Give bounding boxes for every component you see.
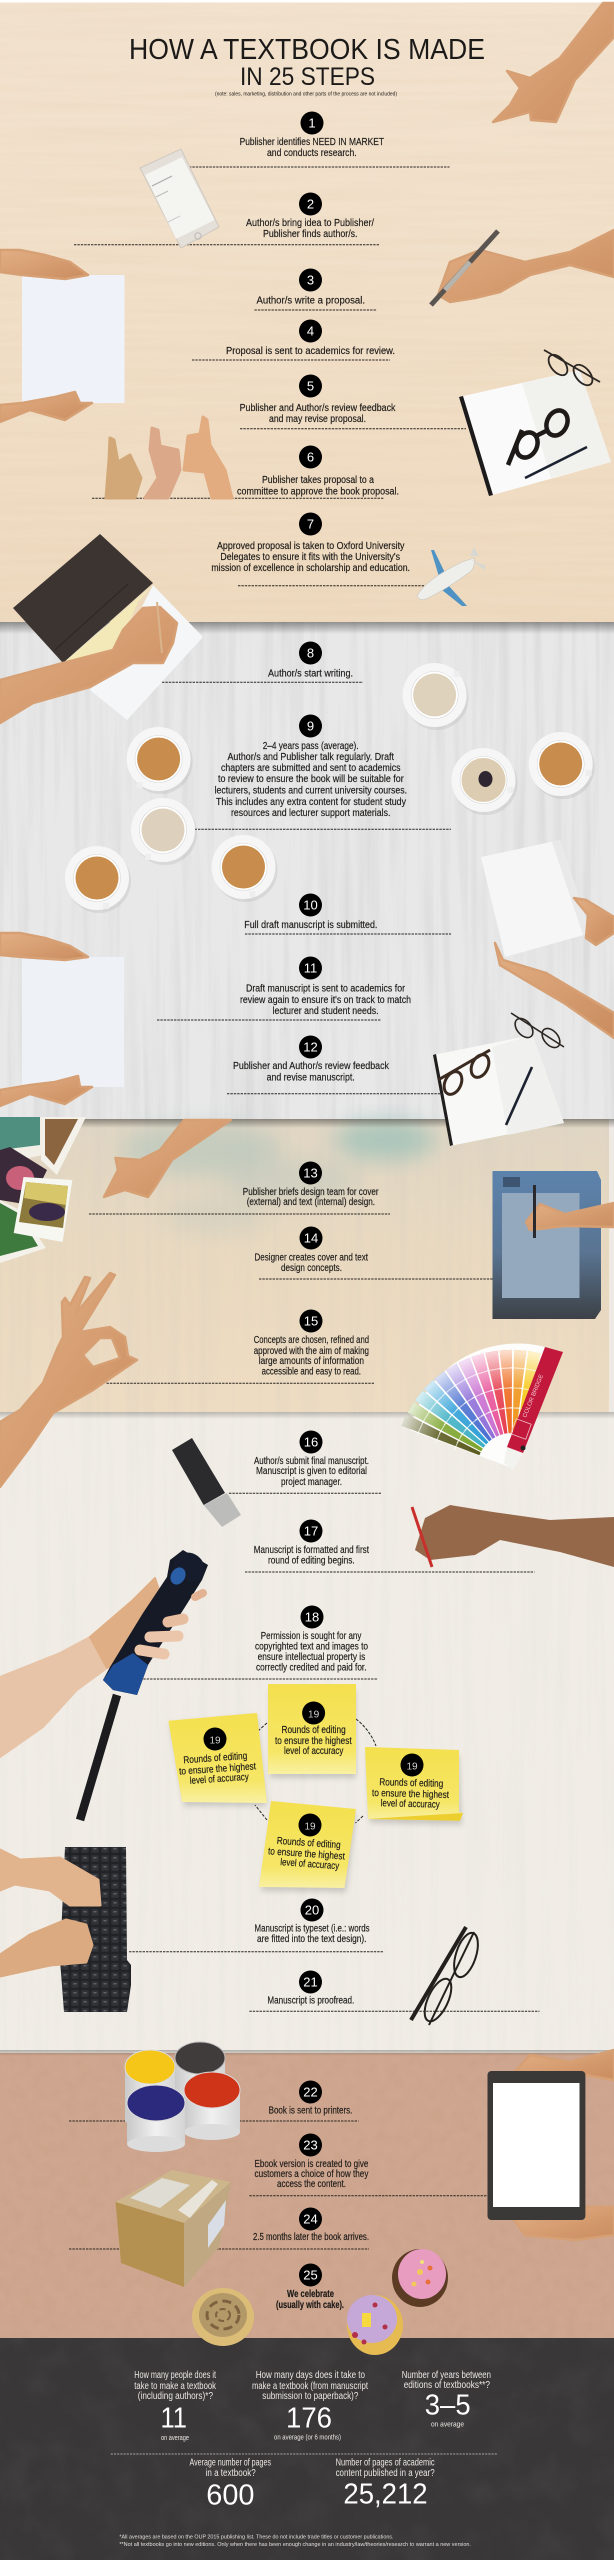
icon: hand holding red pencil (412, 1505, 614, 1567)
stat: average pages (190, 2458, 271, 2512)
sticky note: bottom: Rounds of editing (276, 1836, 341, 1851)
sticky note: right: level of accuracy (381, 1798, 440, 1811)
sticky note: left: to ensure the highest (179, 1761, 257, 1778)
step 20: 20 (305, 1902, 319, 1918)
step 16: project manager. (281, 1477, 342, 1488)
step 20 (129, 1898, 384, 1952)
step 6: Publisher takes proposal to a (262, 475, 374, 486)
step 11 (157, 956, 411, 1020)
step 7: Delegates to ensure it fits with the University's (220, 552, 400, 563)
step 13: 13 (303, 1166, 318, 1180)
icon: USB stick (172, 1438, 241, 1527)
stat: days to make a textbook: make a textbook (from manuscript (252, 2381, 368, 2392)
step 2: Publisher finds author/s. (263, 229, 358, 240)
step 11: Draft manuscript is sent to academics for (246, 984, 406, 994)
stat: years between editions (402, 2370, 491, 2428)
step 12 (227, 1036, 440, 1094)
step 13: (external) and text (internal) design. (247, 1197, 375, 1208)
step 5: 5 (307, 378, 314, 394)
icon: hands holding e-reader tablet (488, 2050, 614, 2240)
sticky note: top (268, 1684, 356, 1778)
icon: pink cupcake (392, 2249, 448, 2307)
sticky note: left (168, 1713, 267, 1806)
sticky note: left: 19 (209, 1736, 221, 1746)
icon: graphics tablet and hand (492, 1171, 614, 1319)
step 3: 3 (307, 272, 314, 288)
step 4: 4 (307, 324, 314, 338)
footnotes (119, 2534, 471, 2548)
panel: statistics chalkboard background (0, 2338, 614, 2560)
step 6 (92, 446, 399, 498)
step 17: 17 (304, 1524, 318, 1538)
panel: proposal stage wood background (0, 0, 614, 622)
sticky note: top: 19 (308, 1710, 320, 1720)
stat: people per textbook: (including authors)*? (138, 2391, 213, 2402)
step 13: Publisher briefs design team for cover (243, 1187, 379, 1198)
step 10: Full draft manuscript is submitted. (244, 920, 377, 931)
step 18: ensure intellectual property is (258, 1652, 365, 1663)
icon: hands holding blank paper (0, 250, 124, 422)
step 9: 9 (307, 718, 314, 734)
step 25: 25 (303, 2268, 318, 2282)
icon: spare glasses (544, 350, 600, 389)
step 9: This includes any extra content for student study (216, 797, 406, 808)
icon: lavender cupcake (347, 2295, 403, 2355)
step 15: accessible and easy to read. (262, 1366, 361, 1378)
sticky note: right (365, 1747, 463, 1825)
stat: academic pages per year: content published in a year? (336, 2468, 435, 2479)
step 15: 15 (304, 1314, 318, 1328)
stat: years between editions: 3–5 (425, 2390, 471, 2422)
step 14: design concepts. (281, 1263, 342, 1274)
step 22 (69, 2080, 359, 2121)
stat: people per textbook: take to make a textbook (134, 2381, 217, 2392)
step 23: 23 (303, 2138, 318, 2152)
stat: people per textbook: 11 (160, 2402, 187, 2434)
step 9: chapters are submitted and sent to academics (221, 763, 400, 774)
title: IN 25 STEPS (240, 63, 375, 91)
step 24 (69, 2208, 369, 2249)
step 12: 12 (303, 1040, 318, 1054)
step 9: 2–4 years pass (average). (263, 741, 359, 752)
stat: average pages: 600 (206, 2480, 254, 2512)
step 2: 2 (307, 196, 314, 212)
sticky note: left: Rounds of editing (183, 1751, 248, 1766)
icon: coffee cup foam left (131, 798, 197, 865)
step 4 (192, 320, 395, 360)
sticky note: bottom: to ensure the highest (268, 1846, 345, 1863)
stat: years between editions: Number of years between (402, 2370, 491, 2381)
step 12: Publisher and Author/s review feedback (233, 1061, 390, 1072)
icon: pointing hand top right (493, 3, 614, 122)
step 7: mission of excellence in scholarship and education. (211, 563, 410, 574)
step 15: approved with the aim of making (254, 1346, 369, 1357)
step 18: correctly credited and paid for. (256, 1662, 366, 1674)
step 22: Book is sent to printers. (269, 2106, 352, 2116)
sticky note: right: to ensure the highest (372, 1788, 449, 1801)
icon: scattered photographs (0, 1117, 86, 1263)
step 11: review again to ensure it's on track to match (240, 995, 411, 1006)
step 9 (195, 714, 451, 829)
icon: coffee cup nearly empty (452, 748, 518, 815)
step 9: lecturers, students and current university courses. (215, 786, 407, 796)
icon: OK hand gesture (0, 1273, 137, 1487)
step 14 (254, 1226, 492, 1279)
icon: pointing hand from top (104, 1120, 231, 1197)
step 9: to review to ensure the book will be suitable for (218, 774, 404, 785)
step 20: are fitted into the text design). (257, 1934, 366, 1945)
step 9: resources and lecturer support materials. (231, 808, 390, 819)
footnotes: *All averages are based on the OUP 2015 publishing list. These do not include trade titles or customer publications. (119, 2534, 394, 2540)
sticky note: right: Rounds of editing (379, 1777, 443, 1790)
sticky note: right: 19 (406, 1762, 418, 1772)
step 8 (162, 642, 363, 682)
step 8: 8 (307, 646, 314, 660)
stat: average pages: Average number of pages (190, 2458, 271, 2468)
icon: coffee cup left upper (127, 727, 193, 794)
step 10: 10 (303, 898, 318, 912)
step 15: large amounts of information (259, 1356, 364, 1367)
icon: cardboard parcel (116, 2170, 231, 2287)
title: HOW A TEXTBOOK IS MADE (129, 34, 485, 66)
step 18: copyrighted text and images to (255, 1642, 368, 1652)
icon: coffee cup latte right top (403, 663, 469, 730)
step 18: Permission is sought for any (261, 1631, 361, 1642)
step 22: 22 (303, 2084, 318, 2100)
icon: keyboard and typing hands (0, 1847, 131, 2012)
stat: academic pages per year: 25,212 (343, 2478, 428, 2510)
step 7 (211, 512, 425, 586)
step 5: and may revise proposal. (269, 414, 366, 425)
sticky note: top: to ensure the highest (275, 1736, 352, 1747)
step 16: Author/s submit final manuscript. (254, 1456, 369, 1467)
stat: days to make a textbook: submission to paperback)? (262, 2391, 359, 2402)
step 15: Concepts are chosen, refined and (254, 1335, 369, 1346)
stat: years between editions: editions of textbooks**? (404, 2380, 490, 2391)
step 23 (249, 2134, 488, 2196)
sticky note cycle step 19 (168, 1684, 463, 1892)
icon: hand holding telephone (0, 1547, 210, 1820)
step 5 (240, 374, 466, 429)
stat: academic pages per year: Number of pages of academic (336, 2458, 435, 2468)
icon: hand writing with pen (431, 230, 614, 305)
icon: airplane (417, 547, 486, 606)
step 9: Author/s and Publisher talk regularly. Draft (228, 752, 394, 763)
footnotes: **Not all textbooks go into new editions. Only when there has been enough change in an industry/law/theories/research to warrant a new version. (119, 2542, 471, 2548)
stat: years between editions: on average (431, 2422, 464, 2428)
step 13 (89, 1162, 390, 1214)
step 23: Ebook version is created to give (254, 2159, 369, 2170)
step 15 (106, 1310, 374, 1383)
icon: coffee cup centre lower (212, 835, 278, 902)
icon: thumbs up hands (106, 417, 232, 498)
title: (note: sales, marketing, distribution and other parts of the process are not included) (215, 92, 397, 98)
icon: hands holding white book (481, 840, 614, 1038)
step 3 (254, 268, 377, 310)
step 20: Manuscript is typeset (i.e.: words (254, 1924, 370, 1934)
step 1: Publisher identifies NEED IN MARKET (240, 137, 384, 148)
sticky note: bottom: level of accuracy (280, 1857, 340, 1872)
stat: days to make a textbook: on average (or 6 months) (274, 2434, 341, 2442)
sticky note: bottom: 19 (304, 1822, 316, 1832)
step 12: and revise manuscript. (267, 1072, 355, 1084)
step 2 (74, 192, 379, 245)
step 14: Designer creates cover and text (254, 1252, 368, 1264)
stat: days to make a textbook (252, 2370, 368, 2442)
icon: open notebook with glasses (433, 1035, 564, 1146)
stat: people per textbook (134, 2370, 217, 2442)
icon: smartphone (140, 149, 219, 248)
step 6: committee to approve the book proposal. (237, 486, 399, 498)
step 25: We celebrate (287, 2289, 334, 2300)
step 17: round of editing begins. (268, 1556, 355, 1566)
sticky note: bottom (259, 1801, 356, 1892)
icon: ink cans (125, 2042, 240, 2152)
icon: coffee cup far right (529, 732, 595, 799)
step 10 (244, 894, 451, 934)
step 21: 21 (303, 1974, 318, 1990)
step 18: 18 (305, 1610, 319, 1624)
step 8: Author/s start writing. (268, 668, 353, 680)
stat: average pages: in a textbook? (206, 2468, 256, 2479)
stat: days to make a textbook: 176 (286, 2402, 332, 2434)
step 5: Publisher and Author/s review feedback (240, 403, 396, 414)
step 7: 7 (307, 516, 314, 532)
icon: spare glasses on wood (511, 1013, 564, 1051)
sticky note: left: level of accuracy (189, 1772, 249, 1787)
step 1: 1 (308, 116, 316, 130)
icon: hands holding blank manuscript (0, 933, 124, 1106)
step 21 (249, 1970, 540, 2011)
step 23: access the content. (277, 2179, 346, 2190)
step 2: Author/s bring idea to Publisher/ (246, 218, 374, 229)
icon: caramel cupcake (192, 2288, 254, 2346)
stat: people per textbook: on average (161, 2435, 189, 2442)
icon: dark notebook with hand writing (0, 534, 203, 723)
step 3: Author/s write a proposal. (256, 296, 365, 306)
step 24: 24 (303, 2212, 318, 2226)
step 7: Approved proposal is taken to Oxford University (217, 541, 404, 552)
step 23: customers a choice of how they (254, 2169, 368, 2180)
icon: reading glasses (411, 1927, 483, 2025)
step 14: 14 (304, 1230, 318, 1246)
step 17: Manuscript is formatted and first (254, 1545, 369, 1556)
step 16 (229, 1430, 382, 1493)
step 17 (245, 1520, 534, 1572)
step 16: 16 (304, 1434, 318, 1450)
step 18 (143, 1606, 378, 1679)
step 21: Manuscript is proofread. (267, 1996, 354, 2006)
step 25: (usually with cake). (276, 2300, 344, 2311)
step 16: Manuscript is given to editorial (256, 1466, 367, 1477)
icon: open notebook with glasses and pen (459, 370, 611, 496)
panel: printing stage kraft background (0, 2050, 614, 2338)
sticky note: top: Rounds of editing (282, 1725, 346, 1736)
step 24: 2.5 months later the book arrives. (253, 2232, 369, 2243)
icon: colour swatch fan: COLOR BRIDGE (522, 1374, 545, 1419)
icon: colour swatch fan (401, 1343, 563, 1470)
stat: academic pages per year (336, 2458, 435, 2510)
stat: days to make a textbook: How many days does it take to (256, 2370, 365, 2381)
panel: design stage wood background (0, 1119, 614, 2053)
step 1: and conducts research. (267, 148, 357, 159)
sticky note: top: level of accuracy (284, 1746, 343, 1757)
step 6: 6 (307, 450, 314, 464)
icon: coffee cup far left lower (65, 846, 131, 913)
step 11: lecturer and student needs. (272, 1006, 379, 1017)
step 11: 11 (304, 960, 317, 976)
stat: people per textbook: How many people does it (134, 2370, 216, 2381)
step 25 (276, 2264, 344, 2311)
title (129, 34, 485, 98)
step 1 (189, 112, 450, 167)
panel: writing stage white wood background (0, 622, 614, 1119)
step 4: Proposal is sent to academics for review. (226, 346, 395, 357)
